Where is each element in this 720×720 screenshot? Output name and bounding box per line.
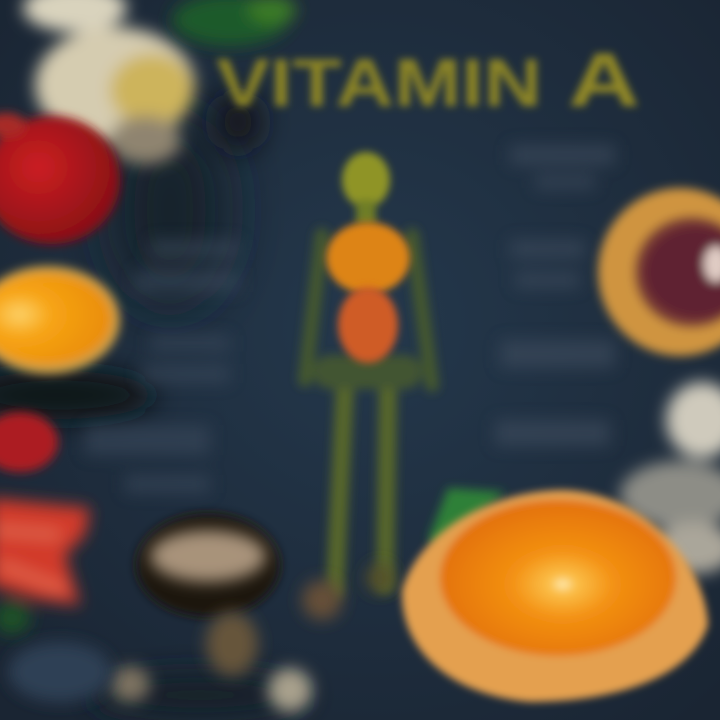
- left text column: blurred labels: [85, 240, 240, 493]
- right text column: blurred labels: [495, 145, 615, 446]
- head: [342, 152, 390, 224]
- food: sliced red pepper left: [0, 498, 90, 634]
- heading: VITAMIN A: A: [568, 38, 640, 123]
- feet: [302, 564, 394, 620]
- human body figure: [302, 152, 432, 620]
- skeleton limbs: [305, 235, 432, 590]
- food: white cauliflower right: [620, 382, 720, 574]
- food: garlic and white vegetables top left: [23, 0, 195, 164]
- food: small strawberry left: [0, 412, 58, 472]
- heading: VITAMIN A: [216, 38, 640, 123]
- food: green leaf top: [172, 0, 296, 46]
- torso: red abdomen: [338, 287, 398, 363]
- food: citrus slice top right: [598, 188, 720, 356]
- food: red strawberry left: [0, 113, 120, 244]
- shadow under leaf: [214, 94, 262, 150]
- food: green leaf by orange: [428, 488, 505, 548]
- food: mushroom and nuts: [8, 513, 312, 712]
- food: orange slice left: [0, 266, 120, 374]
- torso: orange chest: [326, 222, 410, 294]
- food: large orange slice bottom right: [402, 490, 708, 702]
- heading: VITAMIN A: VITAMIN: [216, 45, 542, 121]
